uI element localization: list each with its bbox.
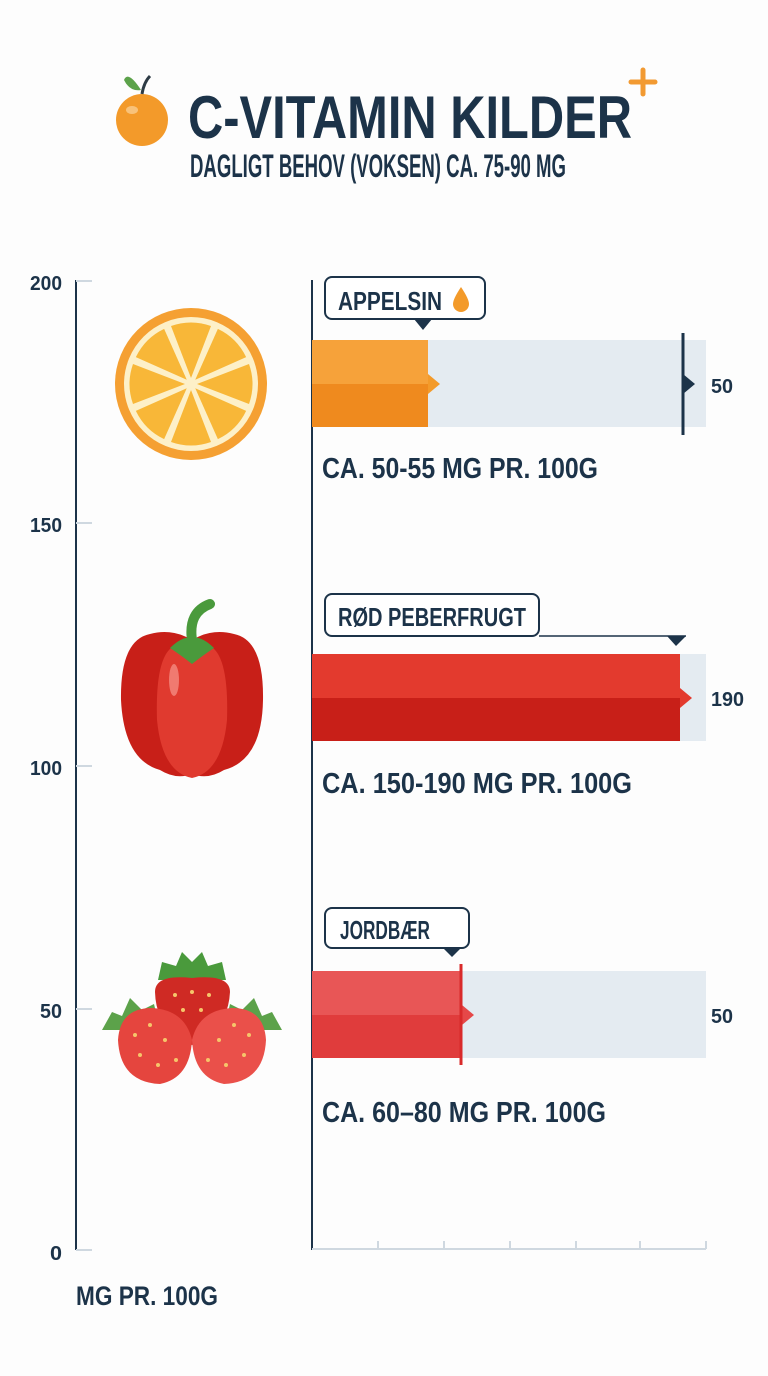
label: jordbaer: JORDBÆR <box>340 915 430 945</box>
icon: strawberries <box>102 952 282 1084</box>
icon: plus <box>631 70 655 94</box>
value: 50: 50 <box>711 1006 733 1028</box>
icon: orange title <box>116 76 168 146</box>
text: amount jordbaer: CA. 60–80 MG PR. 100G <box>322 1097 606 1129</box>
left axis: 150 <box>30 515 62 537</box>
text: amount appelsin: CA. 50-55 MG PR. 100G <box>322 453 598 485</box>
left axis: 200 <box>30 273 62 295</box>
icon: orange slice <box>115 308 267 460</box>
axis unit label: MG PR. 100G <box>76 1281 218 1311</box>
left axis: 50 <box>40 1001 62 1023</box>
label: appelsin <box>325 277 485 330</box>
text: amount pepper: CA. 150-190 MG PR. 100G <box>322 768 632 800</box>
label: appelsin: APPELSIN <box>338 286 442 316</box>
label: roed peberfrugt <box>325 594 686 646</box>
left axis: 0 <box>50 1243 62 1265</box>
chart axes <box>312 280 706 1250</box>
panel: appelsin <box>312 277 733 485</box>
panel: roed peberfrugt <box>312 594 744 800</box>
value: 50: 50 <box>711 376 733 398</box>
label: roed peberfrugt: RØD PEBERFRUGT <box>338 602 526 632</box>
label: jordbaer <box>325 908 469 957</box>
value: 190: 190 <box>711 689 744 711</box>
title: C-VITAMIN KILDER <box>188 84 632 151</box>
bar: appelsin <box>312 333 706 435</box>
bar: jordbaer <box>312 964 706 1065</box>
panel: jordbaer <box>312 908 733 1129</box>
left axis <box>30 273 92 1265</box>
bar: roed peberfrugt <box>312 654 706 741</box>
icon: pepper <box>121 604 263 778</box>
left axis: 100 <box>30 758 62 780</box>
